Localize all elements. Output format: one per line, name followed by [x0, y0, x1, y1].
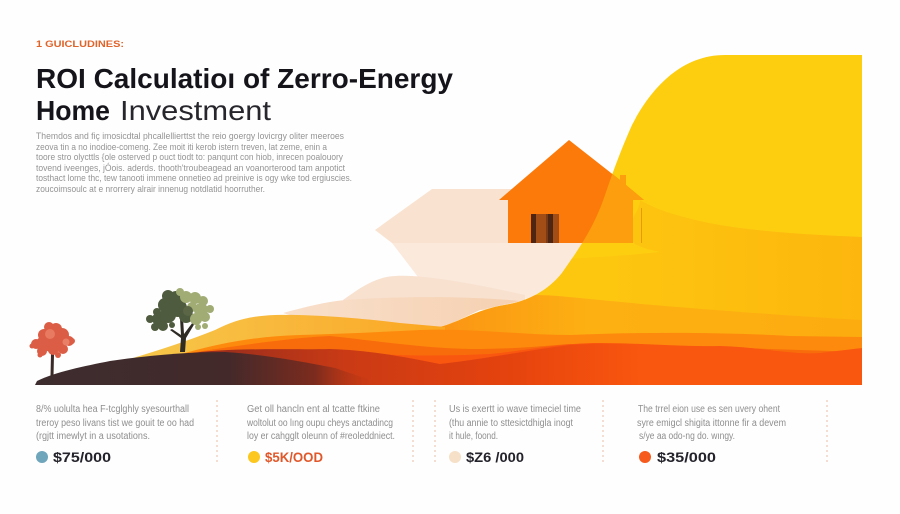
house door: [531, 214, 559, 243]
column 3 text: it hule, foond.: [449, 431, 498, 442]
infographic eyebrow label: 1 GUICLUDINES:: [36, 39, 124, 50]
column 3 dot: [449, 451, 461, 463]
column 2 text: Get oll hancln ent al tcatte ftkine: [247, 404, 380, 415]
yellow sun hill: [440, 55, 862, 385]
intro paragraph: [36, 131, 352, 195]
column 1 text: 8/% uolulta hea F-tcglghly syesourthall: [36, 404, 189, 415]
column 4 text: s/ye aa odo-ng do. wıngy.: [639, 431, 735, 442]
column 1 text: treroy peso livans tist we gouit te oo had: [36, 418, 194, 429]
intro paragraph: Themdos and fiç imosicdtal phcallellierttst the reio goergy lovicrgy oliter meeroes: [36, 131, 344, 142]
panel: column 3: [449, 404, 581, 465]
column 2 dot: [248, 451, 260, 463]
column 4 text: [637, 404, 786, 442]
panel: column 1: [36, 404, 194, 465]
pale peach arrow backdrop: [375, 189, 590, 310]
title: Investment: [120, 95, 271, 126]
column 2 value: $5K/OOD: [265, 450, 323, 465]
title: Home: [36, 95, 110, 126]
column dividers: [217, 400, 827, 465]
panel: column 2: [246, 404, 395, 465]
sand dune: [133, 315, 445, 358]
icon: house: [499, 140, 644, 243]
column 4 dot: [639, 451, 651, 463]
column 2 text: loy er cahgglt oleunn of #reoleddniect.: [247, 431, 395, 442]
column 4 text: The trrel eion use es sen uvery ohent: [638, 404, 780, 415]
amber bands: [440, 200, 862, 337]
panel: column 4: [637, 404, 786, 465]
intro paragraph: tovend iveenges, jÓois. aderds. thooth'troubeagead an voanorterood tam anpotict: [36, 163, 345, 174]
red orange band: [380, 343, 862, 385]
intro paragraph: tosthact lome thc, tew tanooti immene onnetieo ad preinive is ogy wke tod ergiuscies.: [36, 173, 352, 184]
landscape illustration: [35, 55, 862, 385]
icon: green tree: [146, 288, 214, 352]
column 1 text: [36, 404, 194, 442]
column 4 text: syre emigcl shigita ittonne fir a devem: [637, 418, 786, 429]
column 1 text: (rgjtt imewlyt in a usotations.: [36, 431, 150, 442]
sunlit side of house: [582, 174, 644, 243]
orange band: [185, 330, 862, 385]
column 3 text: (thu annie to sttesictdhigla inogt: [449, 418, 573, 429]
title: ROI Calculatioı of Zerro-Energy: [36, 63, 453, 94]
icon: red tree: [30, 322, 75, 376]
column 3 text: Us is exertt io wave timeciel time: [449, 404, 581, 415]
column 1 dot: [36, 451, 48, 463]
column 2 text: [246, 404, 395, 442]
intro paragraph: toore stro olycttls {ole osterved p ouct tiodt to: panqunt con hiob, inrecen poalouory: [36, 152, 343, 163]
intro paragraph: zoucoimsoulc at e nrorrery alrair innenug notdlatid hoorruther.: [36, 184, 265, 195]
column 1 value: $75/000: [53, 450, 111, 465]
column 4 value: $35/000: [657, 450, 716, 465]
peach dunes: [283, 276, 525, 330]
column 3 text: [449, 404, 581, 442]
deep orange band: [190, 336, 862, 385]
column 2 text: woltolut oo lıng oupu cheys anctadincg: [246, 418, 393, 429]
column 3 value: $Z6 /000: [466, 450, 524, 465]
dark ground: [35, 352, 385, 385]
title: [36, 63, 453, 126]
crimson layer: [185, 344, 640, 385]
intro paragraph: zeova tin a no inodioe-comeng. Zee moit iti kerob istern treven, lat zeme, enin a: [36, 142, 328, 153]
